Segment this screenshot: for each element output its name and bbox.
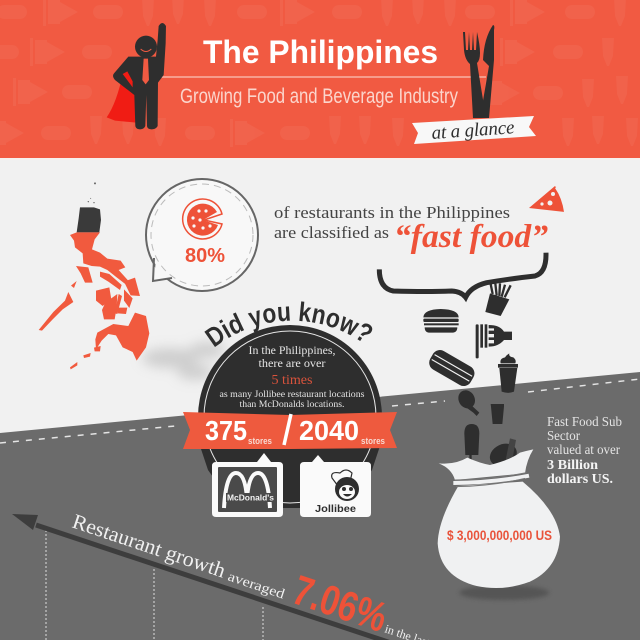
store count ribbon xyxy=(183,412,397,449)
sub sector text: 3 Billion xyxy=(547,458,598,473)
sub sector text: Sector xyxy=(547,429,580,444)
shadow smudge xyxy=(142,342,225,380)
speech bubble: 80% xyxy=(146,179,258,291)
badge text: In the Philippines, xyxy=(248,345,336,357)
ribbon: at a glance: at a glance xyxy=(431,117,515,144)
growth caption xyxy=(69,509,432,640)
growth arrow xyxy=(12,514,400,640)
growth axis verticals xyxy=(46,530,263,640)
bag shadow xyxy=(459,585,549,600)
growth caption: averaged xyxy=(226,570,286,603)
title: The Philippines xyxy=(203,34,438,70)
icon: pizza xyxy=(183,199,222,239)
icon: burger in bag xyxy=(486,438,521,471)
Jollibee logo card: Jollibee xyxy=(315,503,356,515)
grey lower section xyxy=(0,372,640,640)
icon: coffee cup xyxy=(491,404,504,424)
store count ribbon: stores xyxy=(248,436,272,446)
icon: burger xyxy=(423,309,459,333)
bag value: $ 3,000,000,000 US xyxy=(447,527,552,543)
80% figure: 80% xyxy=(185,245,225,267)
badge circle xyxy=(198,325,382,508)
falling food icons xyxy=(423,283,521,471)
icon: drink tray xyxy=(476,324,512,358)
icon: superhero businessman xyxy=(107,23,166,129)
header band xyxy=(0,0,640,160)
statement text: of restaurants in the Philippines xyxy=(274,203,510,222)
did you know badge xyxy=(183,301,397,517)
growth caption: Restaurant growth xyxy=(69,509,229,583)
icon: milkshake xyxy=(498,353,518,393)
badge heading: Did you know? xyxy=(204,301,372,347)
badge text xyxy=(220,345,365,410)
statement text xyxy=(274,203,510,242)
ribbon: at a glance xyxy=(412,116,536,144)
dashed stitching line xyxy=(0,379,640,443)
badge text: 5 times xyxy=(272,373,312,388)
statement text: are classified as xyxy=(274,223,389,242)
sub sector text xyxy=(547,415,622,487)
Jollibee logo card xyxy=(300,455,371,517)
icon: hot dog xyxy=(426,347,477,389)
sub sector text: dollars US. xyxy=(547,472,613,487)
fast food callout: “fast food” xyxy=(394,219,548,255)
store count ribbon: 375 xyxy=(205,415,247,446)
badge text: than McDonalds locations. xyxy=(240,400,344,410)
badge text: there are over xyxy=(258,358,326,370)
bag body xyxy=(438,482,560,588)
icon: chicken leg xyxy=(455,387,479,416)
McDonald's logo card xyxy=(212,453,283,517)
store count ribbon: stores xyxy=(361,436,385,446)
badge text: as many Jollibee restaurant locations xyxy=(220,390,365,400)
icon: fork and knife xyxy=(463,25,494,118)
header rule xyxy=(161,76,486,78)
money bag xyxy=(438,449,560,600)
store count ribbon: 2040 xyxy=(299,415,359,446)
McDonald's logo card: McDonald's xyxy=(227,494,275,502)
icon: pizza slice xyxy=(529,186,567,212)
map of the Philippines xyxy=(39,182,149,369)
sub sector text: valued at over xyxy=(547,443,620,458)
sub sector text: Fast Food Sub xyxy=(547,415,622,430)
subtitle: Growing Food and Beverage Industry xyxy=(180,85,458,108)
curly brace xyxy=(379,253,546,297)
icon: fries xyxy=(485,283,511,316)
icon: popsicle xyxy=(464,424,479,462)
